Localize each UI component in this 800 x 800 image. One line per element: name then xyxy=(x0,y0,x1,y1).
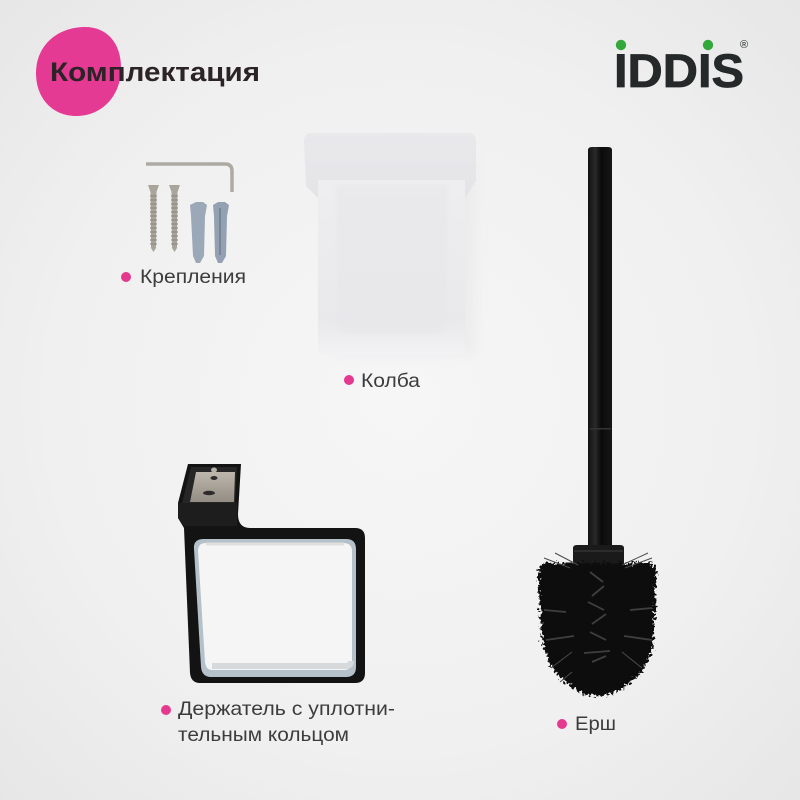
bracket front xyxy=(178,503,237,526)
product: wall holder xyxy=(178,464,365,683)
logo dots xyxy=(616,40,713,50)
collar xyxy=(573,545,624,568)
label: holder xyxy=(161,698,395,746)
registered mark: ® xyxy=(740,39,748,51)
glass shadow xyxy=(330,160,475,355)
label: holder: Держатель с уплотни- xyxy=(178,698,395,720)
ring opening xyxy=(198,543,352,670)
seal ring xyxy=(194,539,356,677)
pink blob xyxy=(36,27,121,116)
handle xyxy=(588,147,612,548)
loose bristles xyxy=(544,553,652,682)
product: toilet brush xyxy=(538,147,656,696)
screw 2 xyxy=(169,185,180,252)
label: brush: Ерш xyxy=(575,713,616,735)
bracket and frame xyxy=(178,464,365,683)
label: hardware: Крепления xyxy=(140,266,246,288)
screw 1 xyxy=(148,185,159,252)
title: Комплектация xyxy=(50,57,260,87)
bracket inner xyxy=(182,467,237,503)
wall plug 1 xyxy=(190,202,207,263)
bristle head xyxy=(538,563,656,696)
label: glass: Колба xyxy=(361,370,420,392)
title badge xyxy=(36,27,260,116)
centre highlights xyxy=(544,572,652,662)
product: frosted glass cup xyxy=(304,133,476,355)
label: holder: тельным кольцом xyxy=(178,724,349,746)
handle joint xyxy=(590,428,611,430)
glass body xyxy=(318,180,465,355)
allen key xyxy=(146,164,232,192)
wall plug 2 xyxy=(213,202,229,263)
mounting plate xyxy=(190,472,235,502)
product: mounting hardware xyxy=(146,164,232,263)
label: brush xyxy=(557,713,616,735)
glass rim xyxy=(304,133,476,198)
logo: IDDIS: IDDIS xyxy=(614,44,744,97)
